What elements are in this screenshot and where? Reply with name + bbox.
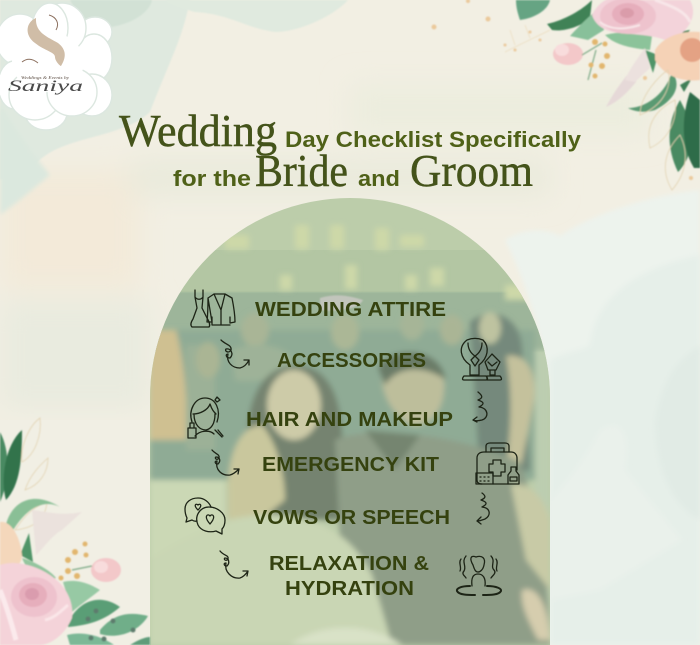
rose (0, 563, 72, 645)
watercolor: right wash (505, 190, 700, 645)
title line 2: and (358, 166, 400, 191)
item: wedding attire (191, 290, 446, 327)
item: relaxation and hydration: HYDRATION (285, 578, 414, 600)
item: vows or speech (185, 498, 450, 534)
left orange shirt (150, 330, 187, 440)
icon: heart speech bubbles (185, 498, 225, 534)
checklist (185, 290, 519, 600)
title line 1: Day Checklist Specifically (285, 127, 582, 152)
bud (91, 558, 121, 582)
sign pink (320, 295, 363, 311)
man suit (335, 433, 550, 645)
icon: first aid kit (476, 443, 519, 484)
arrow: emergency to vows (477, 493, 489, 524)
arrow: vows to relaxation (220, 551, 248, 578)
bud (553, 43, 583, 65)
peach (655, 32, 700, 80)
floral: bottom left (0, 418, 150, 645)
icon: jewellery (461, 338, 502, 380)
title (119, 105, 582, 196)
logo (0, 3, 112, 130)
title line 1: Wedding (119, 105, 277, 156)
item: wedding attire: WEDDING ATTIRE (255, 299, 446, 321)
title line 1 (119, 105, 582, 156)
title line 2 (173, 145, 533, 196)
logo text: Weddings & Events by (21, 75, 70, 80)
logo flower (0, 3, 112, 130)
logo: Saniya (8, 78, 83, 95)
item: relaxation and hydration (269, 553, 501, 600)
logo monogram (28, 18, 65, 66)
title line 2: for the (173, 166, 251, 191)
arrow: hair to emergency (212, 450, 239, 475)
item: hair and makeup (188, 397, 453, 438)
icon: dress and jacket (191, 290, 235, 327)
icon: spa (457, 556, 501, 595)
icon: makeup (188, 397, 223, 438)
watercolor: top-left wash (0, 0, 190, 180)
rose (592, 0, 693, 42)
woman hair (248, 365, 345, 520)
crowd (150, 330, 535, 480)
item: vows or speech: VOWS OR SPEECH (253, 507, 450, 529)
man (382, 357, 444, 426)
title line 2: Groom (410, 145, 533, 196)
panel: arch photo (150, 198, 550, 645)
peach (0, 522, 22, 568)
arrow: attire to accessories (221, 340, 249, 368)
floral: top right (432, 0, 700, 190)
title line 2: Bride (255, 145, 348, 196)
woman arm + dress (150, 479, 225, 556)
paper bottom left (0, 420, 150, 645)
item: relaxation and hydration: RELAXATION & (269, 553, 429, 575)
item: emergency kit: EMERGENCY KIT (262, 454, 439, 476)
item: emergency kit (262, 443, 519, 484)
arrow: accessories to hair (473, 392, 487, 422)
item: hair and makeup: HAIR AND MAKEUP (246, 409, 453, 431)
item: accessories (277, 338, 502, 380)
item: accessories: ACCESSORIES (277, 350, 426, 372)
